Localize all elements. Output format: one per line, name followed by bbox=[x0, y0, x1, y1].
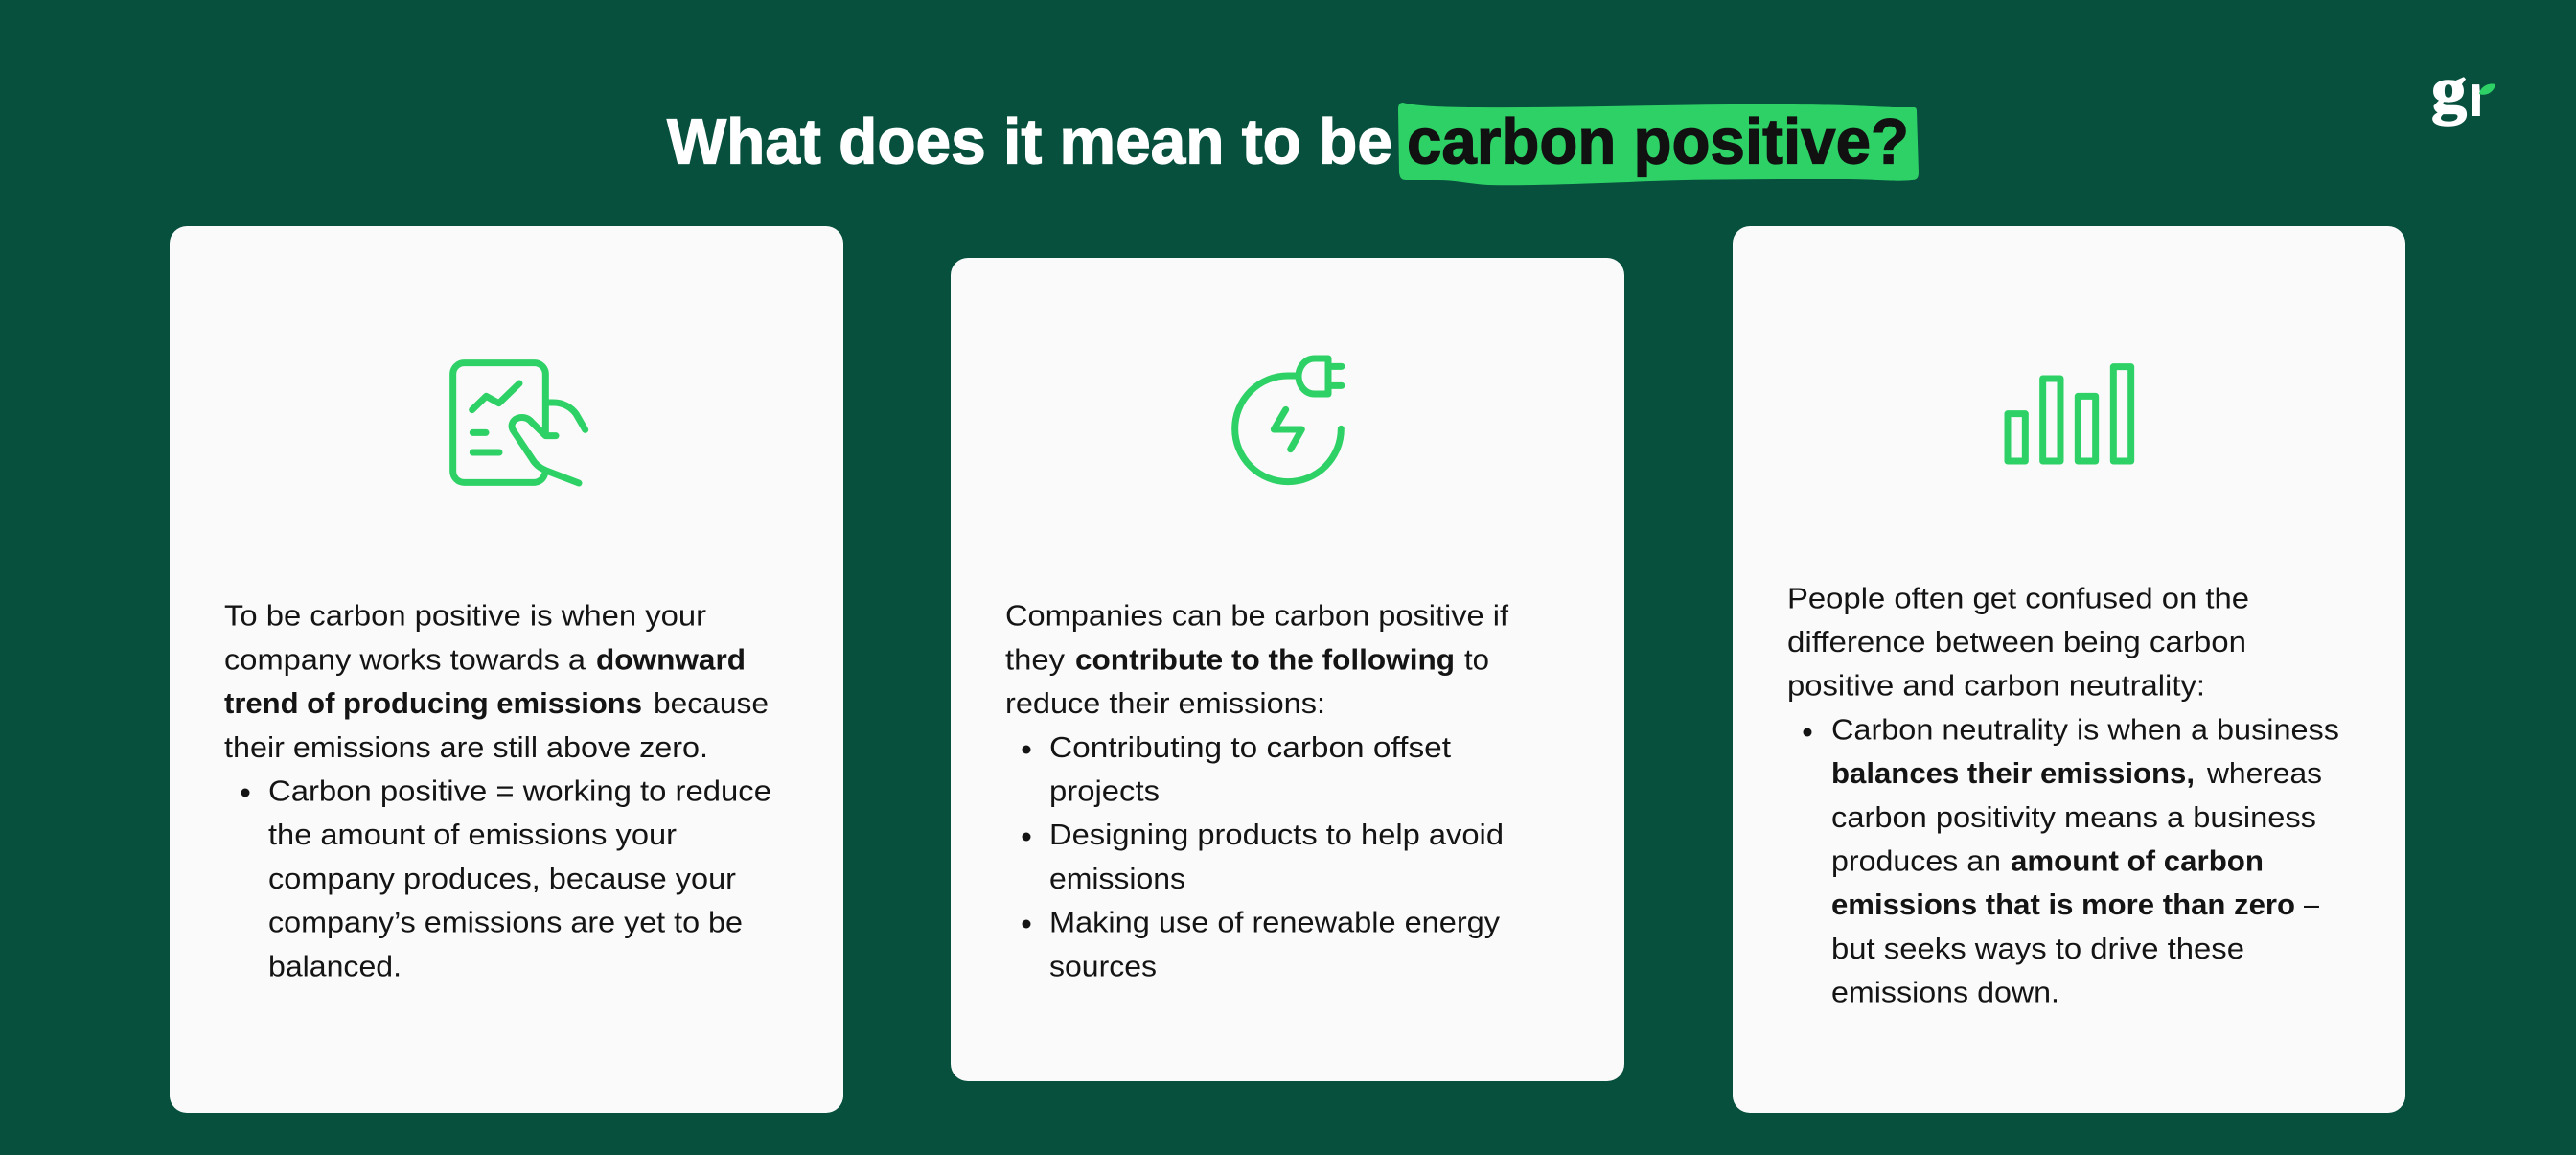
text block: definition: company’s emissions are yet to be bbox=[268, 907, 743, 939]
logo wordmark r: r bbox=[2468, 63, 2491, 129]
text block: contributions: Contributing to carbon offset bbox=[1049, 731, 1452, 764]
text block: contributions: reduce their emissions: bbox=[1005, 687, 1325, 720]
title text: highlighted part: carbon positive? bbox=[1407, 105, 1909, 178]
logo wordmark g: g bbox=[2431, 53, 2467, 126]
text block: definition: their emissions are still above zero. bbox=[224, 731, 708, 764]
text block: comparison: but seeks ways to drive these bbox=[1831, 933, 2244, 965]
text block: comparison: produces an bbox=[1831, 845, 2001, 878]
panel: definition bbox=[170, 226, 843, 1113]
text block: contributions: Making use of renewable energy bbox=[1049, 907, 1501, 939]
text block: comparison: whereas bbox=[2206, 757, 2322, 790]
text block: comparison: amount of carbon bbox=[2011, 845, 2264, 878]
text block: contributions bbox=[1005, 600, 1509, 982]
text block: contributions: emissions bbox=[1049, 863, 1185, 895]
card background bbox=[170, 226, 843, 1113]
text block: comparison: emissions that is more than zero bbox=[1831, 889, 2295, 921]
text block: comparison: emissions down. bbox=[1831, 977, 2059, 1009]
text block: definition: trend of producing emissions bbox=[224, 687, 642, 720]
text block: comparison: difference between being carbon bbox=[1787, 626, 2246, 658]
panel: carbon positive versus carbon neutral bbox=[1733, 226, 2405, 1113]
panel: how companies can be carbon positive bbox=[951, 258, 1624, 1081]
text block: definition: the amount of emissions your bbox=[268, 819, 677, 851]
text block: comparison: – bbox=[2304, 889, 2319, 921]
icon: bar chart bbox=[2008, 367, 2131, 461]
text block: contributions: sources bbox=[1049, 950, 1157, 982]
text block: contributions: they bbox=[1005, 643, 1066, 676]
text block: contributions: projects bbox=[1049, 774, 1160, 807]
text block: definition: company produces, because your bbox=[268, 863, 736, 895]
card background bbox=[1733, 226, 2405, 1113]
text block: contributions: contribute to the following bbox=[1075, 643, 1455, 676]
text block: comparison: positive and carbon neutrality: bbox=[1787, 670, 2205, 703]
text block: contributions: Companies can be carbon positive if bbox=[1005, 600, 1509, 633]
text block: definition: downward bbox=[596, 643, 746, 676]
logo bbox=[2432, 77, 2496, 127]
text block: definition: company works towards a bbox=[224, 643, 586, 676]
title highlight: green brush stroke bbox=[1398, 103, 1919, 185]
text block: definition bbox=[224, 600, 771, 982]
text block: definition: because bbox=[654, 687, 769, 720]
text block: comparison bbox=[1787, 582, 2339, 1009]
title bbox=[667, 103, 1919, 185]
logo leaf bbox=[2479, 84, 2496, 95]
text block: contributions: to bbox=[1464, 643, 1489, 676]
text block: contributions: Designing products to help avoid bbox=[1049, 819, 1504, 851]
text block: definition: balanced. bbox=[268, 950, 402, 982]
text block: comparison: balances their emissions, bbox=[1831, 757, 2195, 790]
text block: comparison: People often get confused on the bbox=[1787, 582, 2249, 614]
card background bbox=[951, 258, 1624, 1081]
text block: definition: To be carbon positive is when your bbox=[224, 600, 706, 633]
icon: plug and lightning bolt bbox=[1235, 358, 1342, 482]
title text: white part: What does it mean to be bbox=[667, 105, 1392, 178]
icon: hand on report chart bbox=[453, 363, 586, 483]
text block: comparison: carbon positivity means a business bbox=[1831, 801, 2316, 834]
text block: definition: Carbon positive = working to reduce bbox=[268, 774, 771, 807]
text block: comparison: Carbon neutrality is when a business bbox=[1831, 713, 2339, 746]
